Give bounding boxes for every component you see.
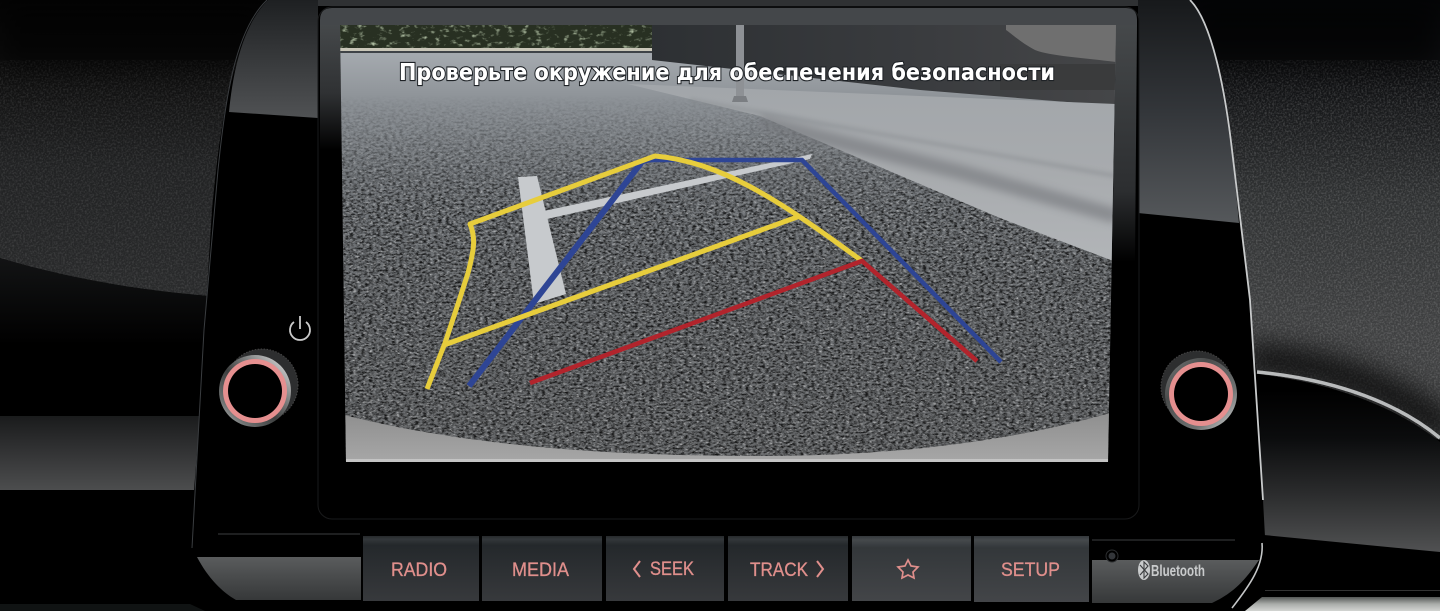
building <box>652 25 1116 106</box>
button label: radio: RADIO <box>391 560 447 581</box>
icon: favourite star <box>898 560 918 578</box>
warning message: Проверьте окружение для обеспечения безопасности <box>399 60 1055 86</box>
yellow guide lines <box>427 156 862 389</box>
lamp post <box>732 25 748 102</box>
left glossy trim <box>0 416 200 490</box>
chrome corner <box>1232 543 1262 608</box>
red guide line <box>530 261 977 383</box>
right shelf <box>1092 560 1259 603</box>
head unit <box>191 0 1266 611</box>
left leather panel <box>0 0 270 345</box>
left knob <box>219 349 298 427</box>
trees <box>340 25 652 53</box>
glossy reflection right <box>1138 0 1239 223</box>
microphone <box>1106 550 1118 562</box>
camera view <box>340 25 1120 470</box>
power icon <box>290 316 310 340</box>
button label: seek: SEEK <box>650 559 694 580</box>
asphalt texture <box>340 90 1116 464</box>
icon: seek chevron <box>634 561 640 577</box>
parking lines <box>518 154 812 304</box>
left shelf <box>197 557 361 600</box>
bluetooth logo <box>1138 560 1205 580</box>
decorative seam <box>218 534 1235 540</box>
button label: media: MEDIA <box>512 560 569 581</box>
right leather panel <box>1190 0 1440 440</box>
screen bezel <box>318 7 1139 519</box>
icon: track chevron <box>817 561 823 577</box>
button bar <box>361 532 1092 605</box>
bumper <box>345 413 1109 461</box>
bluetooth logo: Bluetooth <box>1151 563 1205 580</box>
right glossy trim <box>1258 374 1440 552</box>
blue guide line <box>469 160 1001 386</box>
glossy reflection left <box>229 0 318 118</box>
right knob <box>1161 351 1237 430</box>
sidewalk <box>628 84 1116 262</box>
button label: setup: SETUP <box>1001 560 1060 581</box>
button label: track: TRACK <box>750 560 808 581</box>
